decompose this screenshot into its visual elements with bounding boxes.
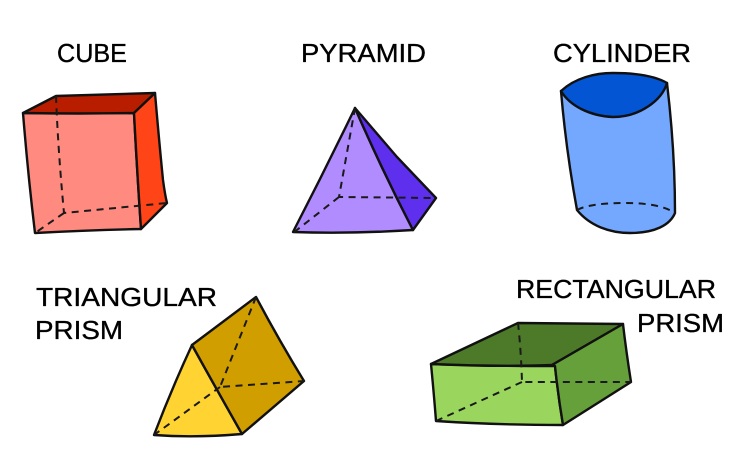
icon: rectangular prism — [431, 323, 631, 425]
heading: pyramid: PYRAMID — [301, 38, 426, 68]
heading: cube: CUBE — [57, 38, 127, 68]
heading: cylinder: CYLINDER — [553, 38, 691, 68]
icon: pyramid — [293, 108, 436, 233]
heading: rectangular prism: PRISM — [637, 308, 724, 338]
heading: rectangular prism — [516, 274, 724, 338]
icon: triangular prism — [154, 297, 304, 436]
heading: triangular prism — [35, 282, 217, 345]
icon: cube — [23, 93, 167, 233]
heading: triangular prism: TRIANGULAR — [36, 282, 217, 312]
heading: triangular prism: PRISM — [35, 315, 123, 345]
heading: rectangular prism: RECTANGULAR — [516, 274, 716, 304]
icon: cylinder — [561, 73, 675, 233]
